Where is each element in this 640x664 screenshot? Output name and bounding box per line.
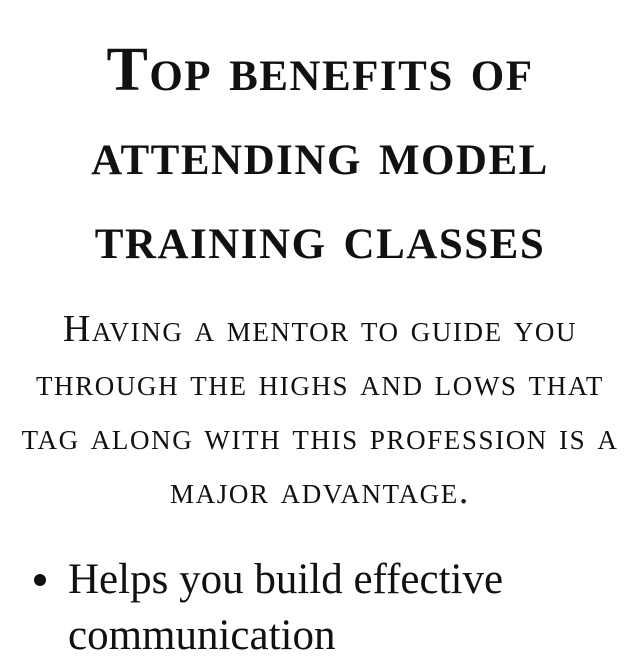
subtitle text block: through the highs and lows that <box>36 362 604 404</box>
title: training classes <box>95 204 545 272</box>
title: attending model <box>91 120 549 188</box>
bullet list <box>34 556 503 659</box>
bullet item: communication: Helps you build effective <box>68 556 503 603</box>
bullet item: communication <box>34 556 503 659</box>
subtitle text block: tag along with this profession is a <box>22 416 618 458</box>
subtitle text block: Having a mentor to guide you <box>63 308 577 350</box>
subtitle text block: major advantage. <box>170 470 470 512</box>
subtitle text block <box>22 308 618 512</box>
bullet item: communication: communication <box>68 612 336 659</box>
title <box>91 36 549 272</box>
title: Top benefits of <box>106 36 533 104</box>
